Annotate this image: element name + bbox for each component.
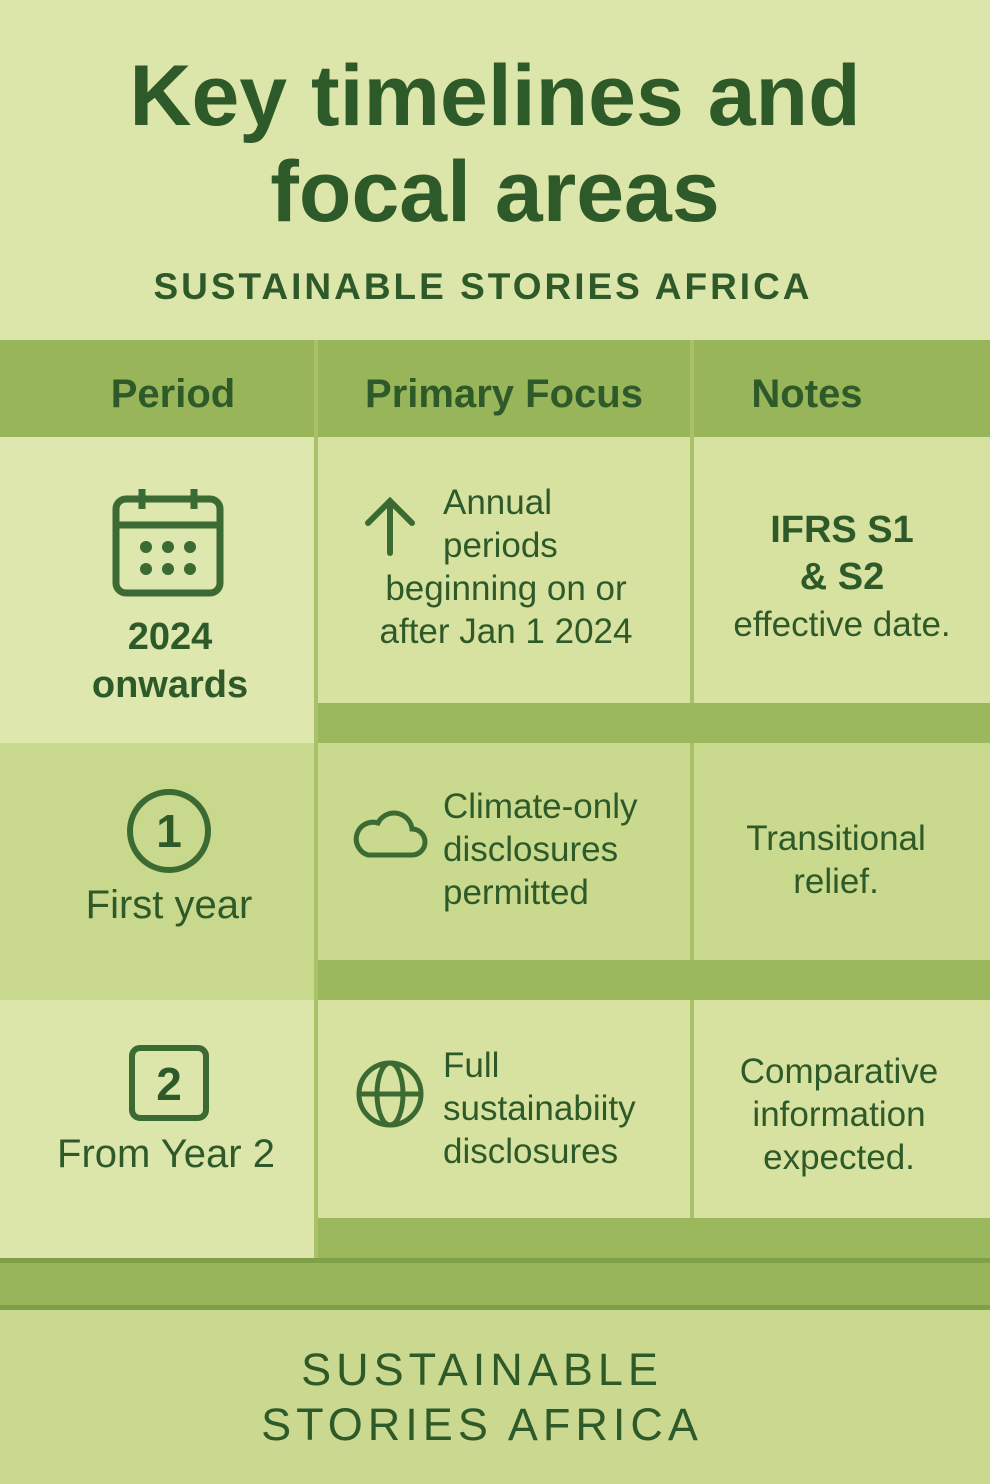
title: Key timelines and bbox=[129, 48, 861, 144]
focus text: periods bbox=[443, 526, 558, 565]
notes: information bbox=[752, 1095, 926, 1134]
title bbox=[129, 48, 861, 240]
focus text: disclosures bbox=[443, 830, 618, 869]
focus text bbox=[443, 787, 638, 912]
period text: onwards bbox=[92, 664, 248, 706]
icon: globe bbox=[356, 1060, 424, 1128]
notes: Comparative bbox=[740, 1052, 938, 1091]
notes: expected. bbox=[763, 1138, 915, 1177]
row 1 bbox=[92, 437, 990, 706]
focus text: Annual bbox=[443, 483, 552, 522]
focus text bbox=[443, 1046, 636, 1171]
focus text: permitted bbox=[443, 873, 589, 912]
row 2 bbox=[0, 743, 990, 1000]
notes: Transitional bbox=[746, 819, 926, 858]
notes bbox=[733, 509, 951, 644]
notes: & S2 bbox=[800, 556, 884, 598]
bottom band bbox=[0, 1258, 990, 1310]
strips bbox=[318, 703, 990, 743]
icon: number 2: 2 bbox=[156, 1058, 182, 1110]
footer bbox=[0, 1310, 990, 1484]
period text: From Year 2 bbox=[57, 1132, 275, 1176]
focus text bbox=[380, 483, 632, 651]
focus text: sustainabiity bbox=[443, 1089, 636, 1128]
period text: 2024 bbox=[128, 616, 212, 658]
focus text: beginning on or bbox=[385, 569, 627, 608]
icon: calendar bbox=[112, 489, 224, 596]
notes: relief. bbox=[793, 862, 879, 901]
icon: number 1 bbox=[127, 789, 211, 873]
row 3 bbox=[57, 1000, 990, 1218]
icon: number 2 bbox=[129, 1045, 209, 1121]
subtitle: SUSTAINABLE STORIES AFRICA bbox=[153, 266, 813, 307]
icon: up arrow bbox=[365, 496, 415, 556]
header: Primary Focus: Primary Focus bbox=[365, 372, 643, 416]
notes: IFRS S1 bbox=[770, 509, 914, 551]
header: Notes: Notes bbox=[751, 372, 863, 416]
focus text: Full bbox=[443, 1046, 499, 1085]
title: focal areas bbox=[270, 144, 720, 240]
period text: First year bbox=[86, 883, 252, 927]
footer text: SUSTAINABLE bbox=[301, 1344, 663, 1395]
focus text: Climate-only bbox=[443, 787, 638, 826]
header: Period: Period bbox=[111, 372, 235, 416]
icon: number 1: 1 bbox=[156, 805, 182, 857]
footer text bbox=[261, 1344, 703, 1450]
period text bbox=[92, 616, 248, 706]
focus text: disclosures bbox=[443, 1132, 618, 1171]
footer text: STORIES AFRICA bbox=[261, 1399, 703, 1450]
focus text: after Jan 1 2024 bbox=[380, 612, 632, 651]
notes: effective date. bbox=[733, 605, 951, 644]
header band bbox=[0, 340, 990, 437]
notes bbox=[740, 1052, 938, 1177]
icon: cloud bbox=[354, 810, 428, 858]
notes bbox=[746, 819, 926, 901]
